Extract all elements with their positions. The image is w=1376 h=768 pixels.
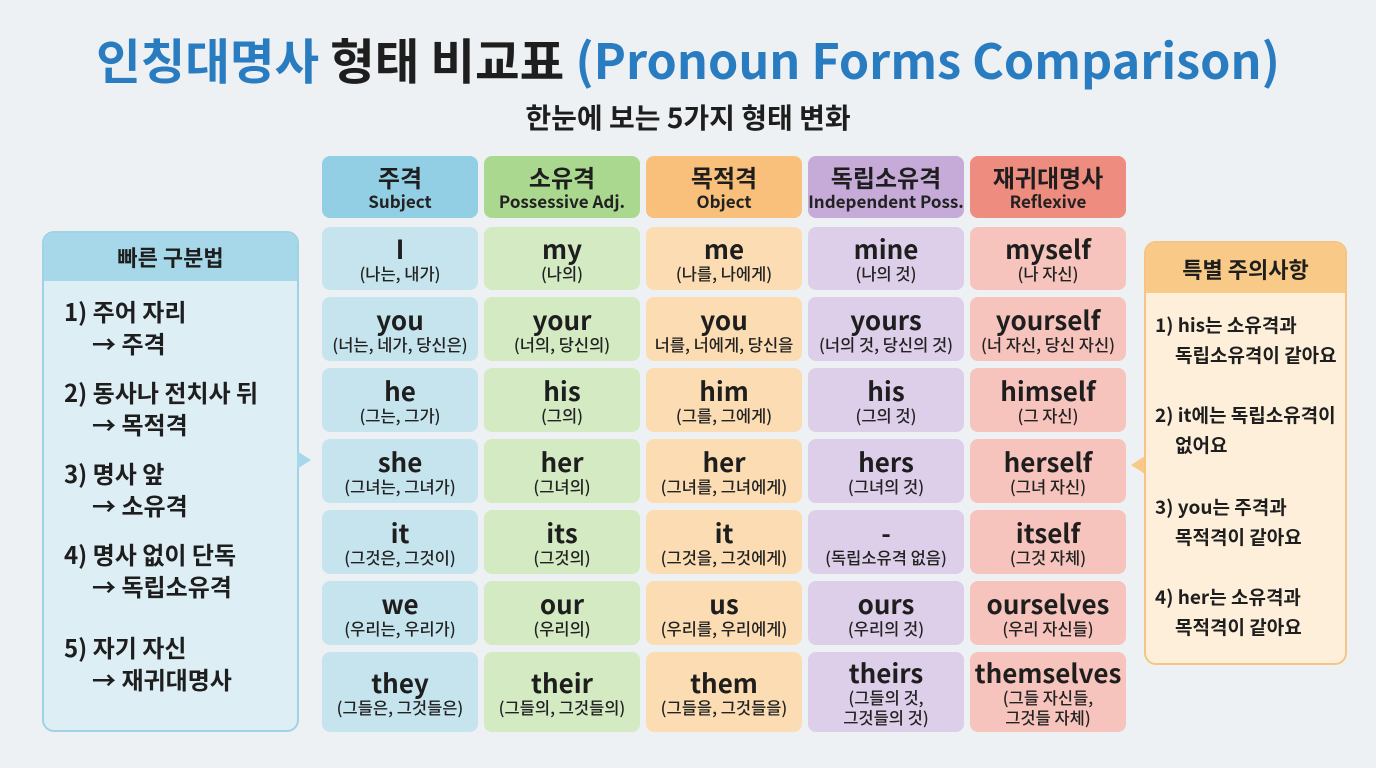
- table: (그녀 자신): [1010, 474, 1086, 498]
- row: he: [322, 368, 1126, 432]
- table: Independent Poss.: [808, 188, 964, 213]
- table: (나의): [541, 261, 583, 285]
- heading: quick guide: 빠른 구분법: [117, 241, 224, 273]
- panel: quick guide: 4) 명사 없이 단독: [64, 536, 236, 571]
- heading: special notes: [1146, 243, 1345, 293]
- table: (그 자신): [1017, 402, 1078, 426]
- table: (그들 자신들,: [1003, 684, 1093, 708]
- heading: quick guide: [44, 233, 297, 281]
- table: (그녀를, 그녀에게): [661, 474, 787, 498]
- row: I: [322, 227, 1126, 290]
- table: ours: [858, 584, 914, 622]
- table: his: [543, 372, 581, 408]
- table: us: [709, 584, 739, 622]
- notes list: [1155, 311, 1337, 640]
- table: (그것을, 그것에게): [661, 544, 787, 568]
- table: my: [542, 230, 582, 267]
- table: (그녀는, 그녀가): [344, 474, 456, 498]
- table: himself: [1000, 372, 1096, 408]
- panel: quick guide: [42, 231, 299, 732]
- panel: special notes: 1) his는 소유격과: [1155, 311, 1297, 338]
- table: Possessive Adj.: [499, 188, 625, 213]
- panel: special notes: [1144, 241, 1347, 665]
- title: 인칭대명사 형태 비교표 (Pronoun Forms Comparison): [96, 23, 1280, 93]
- arrow: right pointer: [1131, 456, 1145, 474]
- panel: special notes: 독립소유격이 같아요: [1175, 341, 1337, 368]
- table: you: [700, 300, 748, 338]
- table: (그의): [541, 402, 583, 426]
- table: (그것의): [533, 544, 591, 568]
- table: yourself: [996, 300, 1100, 338]
- panel: quick guide: 5) 자기 자신: [64, 629, 186, 664]
- table: he: [384, 372, 416, 408]
- table: (우리는, 우리가): [344, 616, 456, 640]
- header row: [322, 156, 1126, 218]
- table: (그들은, 그것들은): [337, 694, 463, 718]
- table: herself: [1004, 442, 1092, 480]
- table: (그들의, 그것들의): [499, 694, 625, 718]
- table: 그것들 자체): [1005, 704, 1091, 728]
- row: we: [322, 581, 1126, 645]
- table: our: [540, 584, 584, 622]
- table: 소유격: [529, 159, 595, 194]
- panel: quick guide: → 주격: [92, 325, 166, 360]
- table: they: [371, 664, 429, 700]
- table: (나를, 나에게): [676, 261, 772, 285]
- table: (그들을, 그것들을): [661, 694, 787, 718]
- table: 독립소유격: [831, 159, 941, 194]
- table: we: [381, 584, 419, 622]
- table: his: [867, 372, 905, 408]
- table: (그는, 그가): [359, 402, 441, 426]
- table: yours: [850, 300, 922, 338]
- table: your: [533, 300, 591, 338]
- table: [322, 156, 1126, 732]
- row: you: [322, 297, 1126, 361]
- table: Reflexive: [1010, 188, 1086, 213]
- arrow: left pointer: [297, 451, 311, 469]
- table: myself: [1005, 230, 1091, 267]
- table: (너는, 네가, 당신은): [332, 332, 468, 356]
- guide items: [64, 293, 258, 696]
- table: (나의 것): [855, 261, 916, 285]
- table: (그녀의 것): [848, 474, 924, 498]
- table: her: [702, 442, 746, 480]
- table: (독립소유격 없음): [825, 544, 947, 568]
- table: him: [699, 372, 749, 408]
- panel: quick guide: → 목적격: [92, 406, 188, 441]
- table: me: [704, 230, 744, 267]
- table: (우리 자신들): [1002, 616, 1094, 640]
- panel: quick guide: 1) 주어 자리: [64, 293, 186, 328]
- table: -: [881, 514, 891, 550]
- table: mine: [854, 230, 918, 267]
- table: (우리의 것): [848, 616, 924, 640]
- table: you: [376, 300, 424, 338]
- table: (너의 것, 당신의 것): [819, 332, 953, 356]
- panel: special notes: 없어요: [1175, 431, 1227, 458]
- panel: quick guide: → 소유격: [92, 487, 188, 522]
- table: theirs: [849, 654, 923, 690]
- table: her: [540, 442, 584, 480]
- panel: special notes: 목적격이 같아요: [1175, 613, 1302, 640]
- table: Subject: [368, 188, 432, 213]
- table: 주격: [378, 159, 422, 194]
- table: (너의, 당신의): [514, 332, 610, 356]
- table: them: [690, 664, 758, 700]
- table: 너를, 너에게, 당신을: [655, 332, 793, 356]
- table: hers: [858, 442, 914, 480]
- table: I: [396, 230, 404, 267]
- table: (너 자신, 당신 자신): [981, 332, 1115, 356]
- table: it: [391, 514, 409, 550]
- table: (나는, 내가): [359, 261, 441, 285]
- table: 목적격: [691, 159, 757, 194]
- table: (나 자신): [1017, 261, 1078, 285]
- table: ourselves: [987, 584, 1109, 622]
- table: themselves: [975, 654, 1121, 690]
- table: Object: [696, 188, 752, 213]
- table: (그녀의): [533, 474, 591, 498]
- row: they: [322, 652, 1126, 732]
- table: (그의 것): [855, 402, 916, 426]
- subtitle: 한눈에 보는 5가지 형태 변화: [525, 97, 851, 137]
- row: it: [322, 510, 1126, 574]
- panel: quick guide: 3) 명사 앞: [64, 455, 164, 490]
- table: 재귀대명사: [993, 159, 1103, 194]
- table: it: [715, 514, 733, 550]
- panel: special notes: 2) it에는 독립소유격이: [1155, 401, 1336, 428]
- panel: quick guide: 2) 동사나 전치사 뒤: [64, 374, 258, 409]
- table: (그를, 그에게): [676, 402, 772, 426]
- panel: quick guide: → 독립소유격: [92, 568, 232, 603]
- table: its: [546, 514, 578, 550]
- table: (그것은, 그것이): [344, 544, 456, 568]
- table: their: [531, 664, 593, 700]
- table: she: [378, 442, 422, 480]
- panel: special notes: 3) you는 주격과: [1155, 493, 1287, 520]
- panel: quick guide: → 재귀대명사: [92, 661, 232, 696]
- table: (우리의): [533, 616, 591, 640]
- row: she: [322, 439, 1126, 503]
- table: 그것들의 것): [843, 704, 929, 728]
- table: itself: [1016, 514, 1080, 550]
- table: (우리를, 우리에게): [661, 616, 787, 640]
- table: (그것 자체): [1010, 544, 1086, 568]
- panel: special notes: 목적격이 같아요: [1175, 523, 1302, 550]
- panel: special notes: 4) her는 소유격과: [1155, 583, 1301, 610]
- table: (그들의 것,: [848, 684, 924, 708]
- heading: special notes: 특별 주의사항: [1182, 253, 1309, 285]
